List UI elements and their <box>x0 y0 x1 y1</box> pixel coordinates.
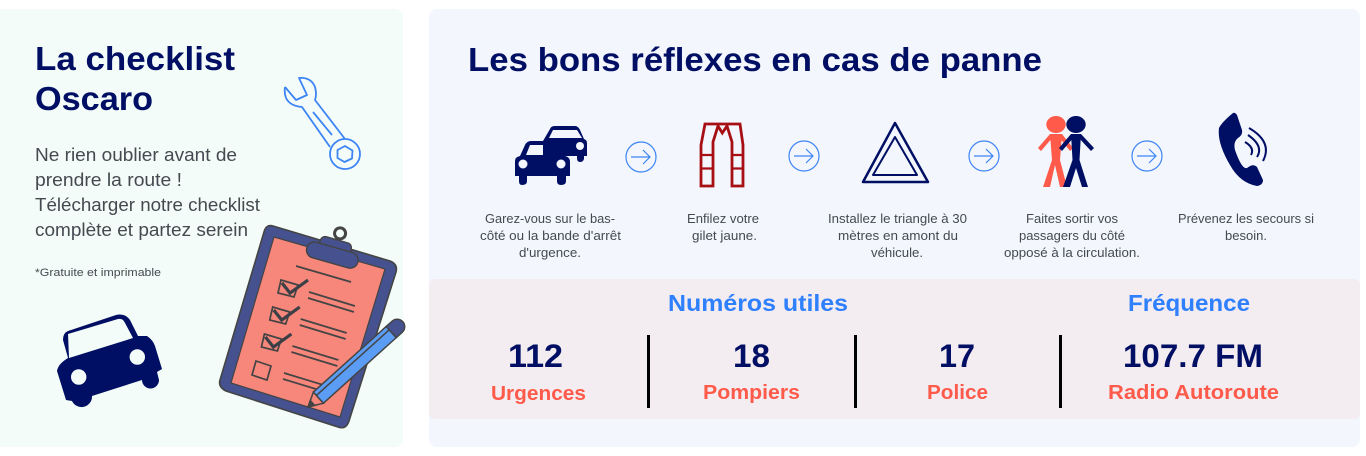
title: La checklist Oscaro: Oscaro <box>35 80 153 117</box>
icon: car <box>57 315 162 407</box>
text: step 4 <box>1004 212 1140 260</box>
text: step 3: véhicule. <box>871 246 923 260</box>
panel: checklist <box>0 9 408 447</box>
icon: safety vest <box>701 124 743 186</box>
text: step 4: opposé à la circulation. <box>1004 246 1140 260</box>
text: step 1: côté ou la bande d'arrêt <box>480 229 622 243</box>
heading: Les bons réflexes: Les bons réflexes en cas de panne <box>468 41 1042 78</box>
text: step 2: Enfilez votre <box>687 212 759 226</box>
text: step 1: Garez-vous sur le bas- <box>485 212 615 226</box>
number: 112: Urgences <box>491 382 586 405</box>
text block: checklist description: prendre la route ! <box>35 169 182 190</box>
text: step 5: Prévenez les secours si <box>1178 212 1314 226</box>
text block: checklist description: Ne rien oublier avant de <box>35 144 237 165</box>
number: 17: 17 <box>939 338 975 374</box>
number: 112 <box>491 338 586 405</box>
heading: Fréquence: Fréquence <box>1128 290 1250 316</box>
arrow 2 <box>789 141 819 171</box>
panel: les bons réflexes <box>429 9 1360 447</box>
number: 17 <box>927 338 988 404</box>
text: step 4: Faites sortir vos <box>1026 212 1118 226</box>
text: step 1 <box>480 212 622 260</box>
text: step 2: gilet jaune. <box>692 229 757 243</box>
text: step 2 <box>687 212 759 243</box>
text block: checklist description: Télécharger notre checklist <box>35 194 260 215</box>
text: step 3: Installez le triangle à 30 <box>828 212 967 226</box>
number: 18 <box>703 338 800 404</box>
title: La checklist Oscaro <box>35 40 235 117</box>
number: 107.7 FM: 107.7 FM <box>1123 338 1263 374</box>
text: step 1: d'urgence. <box>519 246 581 260</box>
text block: checklist description: complète et partez serein <box>35 219 248 240</box>
arrow 1 <box>626 142 656 172</box>
icon: two cars <box>515 126 587 185</box>
number: 17: Police <box>927 381 988 404</box>
title: La checklist Oscaro: La checklist <box>35 40 235 77</box>
text: step 5 <box>1178 212 1314 243</box>
icon: phone <box>1219 113 1266 186</box>
number: 107.7 FM: Radio Autoroute <box>1108 381 1279 404</box>
arrow 3 <box>969 141 999 171</box>
text: step 3: mètres en amont du <box>838 229 958 243</box>
icon: two people <box>1038 116 1094 187</box>
icon: clipboard <box>220 220 408 428</box>
panel: numéros utiles <box>429 279 1360 419</box>
icon: pencil <box>303 316 408 413</box>
icon: wrench <box>285 78 360 169</box>
icon: warning triangle <box>863 123 928 182</box>
text block: checklist description <box>35 144 260 240</box>
number: 18: Pompiers <box>703 381 800 404</box>
number: 18: 18 <box>733 338 770 374</box>
arrow 4 <box>1132 141 1162 171</box>
text: step 5: besoin. <box>1225 229 1267 243</box>
text: step 3 <box>828 212 967 260</box>
footnote: *Gratuite et imprimable <box>35 267 161 279</box>
number: 112: 112 <box>508 338 563 374</box>
number: 107.7 FM <box>1108 338 1279 404</box>
heading: Numéros utiles: Numéros utiles <box>668 290 848 316</box>
text: step 4: passagers du côté <box>1019 229 1125 243</box>
